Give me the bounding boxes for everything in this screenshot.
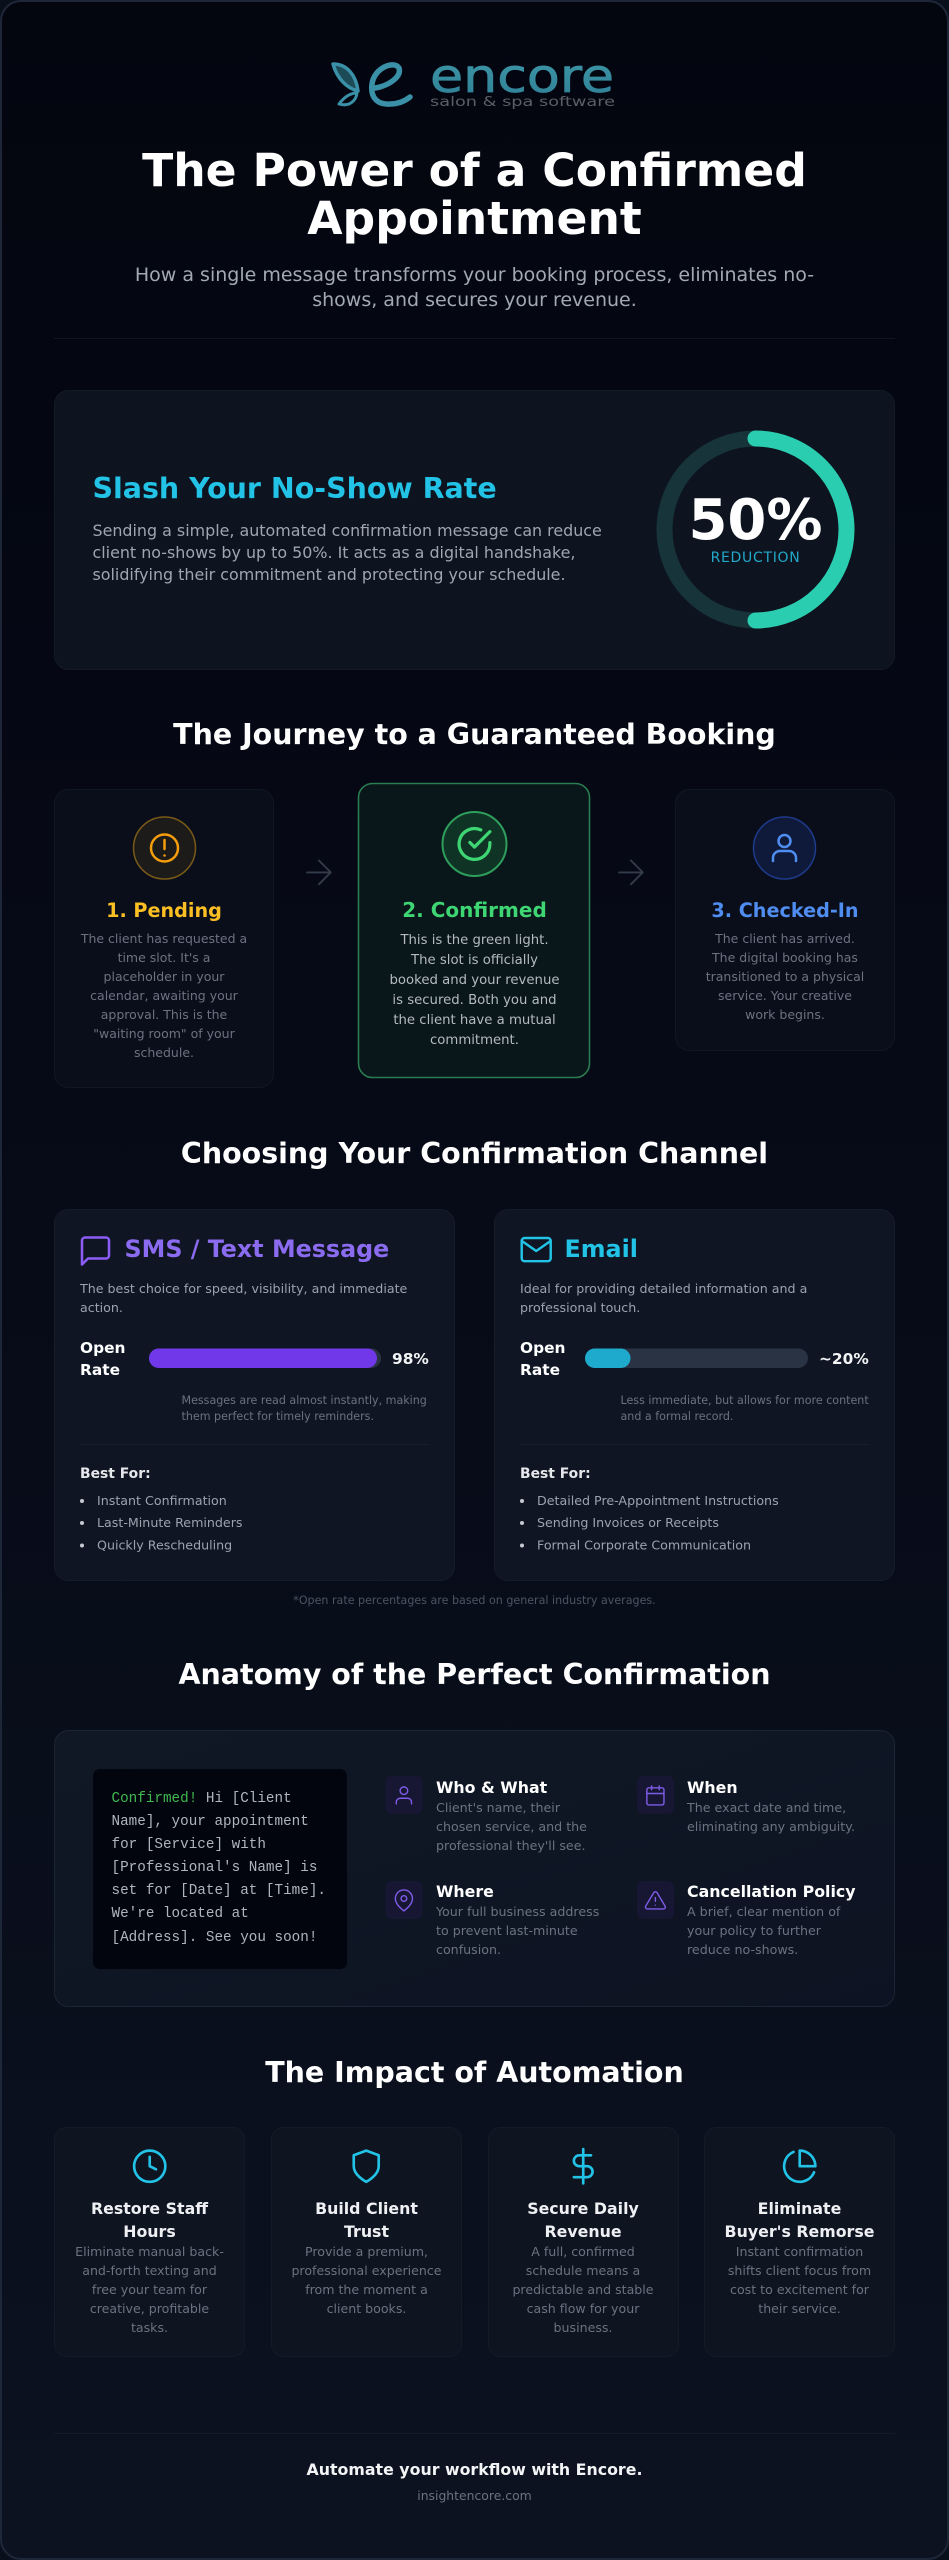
panel: secure daily revenue: predictable and stable bbox=[512, 2282, 654, 2297]
item: when bbox=[637, 1776, 855, 1834]
panel: restore staff hours: Restore Staff bbox=[91, 2199, 208, 2218]
panel: Email channel: Sending Invoices or Receipts bbox=[537, 1515, 719, 1530]
heading: journey: The Journey to a Guaranteed Booking bbox=[173, 718, 776, 751]
item: where: Your full business address bbox=[435, 1904, 599, 1919]
panel: secure daily revenue bbox=[488, 2128, 678, 2356]
panel: secure daily revenue: cash flow for your bbox=[527, 2301, 640, 2316]
sample message: [Professional's Name] is bbox=[112, 1860, 317, 1876]
item: cancellation policy: your policy to further bbox=[687, 1923, 822, 1938]
panel: step 3 checked-in: transitioned to a physical bbox=[706, 969, 864, 984]
panel: step 3 checked-in: 3. Checked-In bbox=[711, 899, 859, 922]
panel: step 1 pending bbox=[54, 790, 274, 1088]
panel: step 2 confirmed bbox=[358, 784, 590, 1078]
subtitle: shows, and secures your revenue. bbox=[312, 289, 637, 311]
sample message: Confirmed! Hi [Client bbox=[112, 1791, 292, 1807]
ring chart: 50% reduction: REDUCTION bbox=[711, 550, 800, 566]
panel: anatomy bbox=[54, 1730, 894, 2006]
panel: step 2 confirmed: booked and your revenue bbox=[390, 973, 560, 988]
item: who and what: chosen service, and the bbox=[436, 1819, 587, 1834]
panel: step 2 confirmed: This is the green light. bbox=[399, 933, 549, 948]
panel: SMS channel: action. bbox=[80, 1300, 123, 1315]
heading: anatomy: Anatomy of the Perfect Confirmation bbox=[178, 1658, 770, 1691]
panel: step 3 checked-in: The digital booking has bbox=[711, 950, 858, 965]
panel: Email channel: Formal Corporate Communication bbox=[537, 1538, 751, 1552]
icon: check bbox=[442, 812, 506, 876]
hero text: Sending a simple, automated confirmation message can reduce bbox=[92, 521, 602, 540]
sample message bbox=[93, 1769, 347, 1969]
panel: Email channel: Best For: bbox=[520, 1466, 591, 1482]
panel: eliminate buyer's remorse bbox=[704, 2128, 894, 2356]
panel: step 3 checked-in: service. Your creative bbox=[718, 988, 852, 1003]
panel: SMS channel: SMS / Text Message bbox=[124, 1235, 389, 1263]
icon: shield bbox=[354, 2151, 379, 2182]
panel: SMS channel: The best choice for speed, visibility, and immediate bbox=[79, 1281, 408, 1296]
sample message: set for [Date] at [Time]. bbox=[112, 1883, 326, 1899]
panel: step 1 pending: 1. Pending bbox=[106, 899, 222, 922]
icon: user bbox=[754, 817, 816, 879]
panel: secure daily revenue: Secure Daily bbox=[527, 2199, 640, 2218]
icon: alert bbox=[134, 817, 196, 879]
sample message: [Address]. See you soon! bbox=[112, 1930, 317, 1946]
panel: eliminate buyer's remorse: Eliminate bbox=[758, 2199, 841, 2218]
item: cancellation policy bbox=[637, 1881, 856, 1957]
footer: insightencore.com bbox=[417, 2488, 532, 2503]
panel: step 1 pending: approval. This is the bbox=[101, 1007, 228, 1022]
panel: eliminate buyer's remorse: cost to excitement for bbox=[730, 2282, 870, 2297]
panel: SMS channel: them perfect for timely reminders. bbox=[182, 1410, 374, 1423]
open rate bar: ~20% bbox=[520, 1339, 869, 1379]
panel: secure daily revenue: schedule means a bbox=[526, 2263, 640, 2278]
sample message: We're located at bbox=[112, 1906, 249, 1922]
item: when: When bbox=[687, 1778, 738, 1797]
ring chart: 50% reduction bbox=[664, 438, 847, 620]
open rate bar: ~20%: Open bbox=[520, 1339, 566, 1357]
panel: secure daily revenue: Revenue bbox=[544, 2222, 622, 2241]
panel: SMS channel: Instant Confirmation bbox=[97, 1493, 227, 1508]
panel: SMS channel: Quickly Rescheduling bbox=[97, 1538, 232, 1552]
panel: eliminate buyer's remorse: Buyer's Remorse bbox=[725, 2222, 874, 2241]
open rate bar: 98%: Rate bbox=[80, 1361, 120, 1379]
panel: Email channel: Less immediate, but allows for more content bbox=[620, 1394, 869, 1407]
hero text: client no-shows by up to 50%. It acts as a digital handshake, bbox=[92, 543, 575, 562]
panel: restore staff hours bbox=[54, 2128, 244, 2356]
panel: build client trust: from the moment a bbox=[305, 2282, 428, 2297]
panel: step 1 pending: calendar, awaiting your bbox=[90, 988, 239, 1003]
item: who and what: professional they'll see. bbox=[436, 1838, 586, 1853]
panel: Email channel: Email bbox=[564, 1235, 638, 1263]
title bbox=[142, 144, 807, 245]
panel: build client trust: professional experience bbox=[291, 2263, 442, 2278]
panel: hero no-show rate bbox=[54, 390, 894, 670]
ring chart: 50% reduction: 50% bbox=[688, 488, 823, 553]
logo: encore: encore bbox=[430, 49, 614, 103]
panel: step 2 confirmed: commitment. bbox=[430, 1033, 519, 1048]
hero text: solidifying their commitment and protecting your schedule. bbox=[92, 565, 566, 584]
panel: build client trust: Trust bbox=[344, 2222, 389, 2241]
icon: dollar bbox=[574, 2149, 593, 2183]
footer: Automate your workflow with Encore. bbox=[307, 2460, 642, 2479]
panel: build client trust bbox=[272, 2128, 462, 2356]
item: where: confusion. bbox=[436, 1942, 501, 1957]
panel: Email channel bbox=[494, 1210, 894, 1580]
panel: restore staff hours: Eliminate manual back- bbox=[75, 2244, 224, 2259]
arrow bbox=[619, 860, 643, 884]
icon: clock bbox=[134, 2151, 165, 2182]
panel: step 1 pending: "waiting room" of your bbox=[93, 1026, 236, 1041]
panel: SMS channel: Messages are read almost instantly, making bbox=[182, 1394, 427, 1407]
logo: encore: salon & spa software bbox=[430, 95, 615, 110]
footer bbox=[307, 2460, 642, 2503]
item: where: Where bbox=[436, 1882, 494, 1901]
icon: mail bbox=[522, 1238, 551, 1261]
panel: step 2 confirmed: 2. Confirmed bbox=[402, 898, 547, 922]
panel: Email channel: Detailed Pre-Appointment Instructions bbox=[537, 1493, 779, 1508]
arrow bbox=[307, 860, 331, 884]
panel: eliminate buyer's remorse: Instant confirmation bbox=[736, 2244, 863, 2259]
title: The Power of a Confirmed bbox=[142, 144, 807, 197]
panel: restore staff hours: creative, profitable bbox=[90, 2301, 209, 2316]
panel: step 3 checked-in: The client has arrived. bbox=[714, 931, 855, 946]
panel: restore staff hours: and-forth texting and bbox=[82, 2263, 217, 2278]
item: where: to prevent last-minute bbox=[436, 1923, 578, 1938]
panel: build client trust: client books. bbox=[327, 2301, 406, 2316]
heading: impact: The Impact of Automation bbox=[265, 2056, 684, 2089]
title: Appointment bbox=[307, 192, 642, 245]
panel: SMS channel: Last-Minute Reminders bbox=[97, 1515, 242, 1530]
panel: step 1 pending: placeholder in your bbox=[104, 969, 225, 984]
panel: restore staff hours: Hours bbox=[123, 2222, 176, 2241]
item: when: The exact date and time, bbox=[686, 1800, 846, 1815]
panel: Email channel: professional touch. bbox=[520, 1300, 640, 1315]
panel: step 1 pending: time slot. It's a bbox=[118, 950, 210, 965]
panel: step 2 confirmed: The slot is officially bbox=[410, 953, 538, 968]
item: when: eliminating any ambiguity. bbox=[687, 1819, 855, 1834]
logo: encore bbox=[333, 49, 615, 110]
panel: step 2 confirmed: is secured. Both you and bbox=[392, 993, 557, 1008]
footnote: *Open rate percentages are based on general industry averages. bbox=[293, 1594, 656, 1607]
subtitle: How a single message transforms your booking process, eliminates no- bbox=[135, 264, 814, 286]
item: cancellation policy: reduce no-shows. bbox=[687, 1942, 798, 1957]
item: cancellation policy: Cancellation Policy bbox=[687, 1882, 856, 1901]
open rate bar: 98%: 98% bbox=[392, 1350, 429, 1368]
open rate bar: ~20%: Rate bbox=[520, 1361, 560, 1379]
panel: SMS channel bbox=[54, 1210, 454, 1580]
panel: step 1 pending: schedule. bbox=[134, 1045, 194, 1060]
item: who and what bbox=[386, 1776, 587, 1853]
sample message: for [Service] with bbox=[112, 1837, 266, 1853]
panel: eliminate buyer's remorse: shifts client focus from bbox=[728, 2263, 871, 2278]
item: who and what: Who & What bbox=[436, 1778, 548, 1797]
heading: channel: Choosing Your Confirmation Channel bbox=[181, 1137, 768, 1170]
hero text bbox=[92, 521, 602, 584]
open rate bar: 98% bbox=[80, 1339, 429, 1379]
panel: step 2 confirmed: the client have a mutual bbox=[393, 1013, 556, 1028]
panel: step 3 checked-in bbox=[676, 790, 894, 1050]
panel: build client trust: Provide a premium, bbox=[305, 2244, 428, 2259]
item: who and what: Client's name, their bbox=[436, 1800, 561, 1815]
hero heading: Slash Your No-Show Rate bbox=[92, 472, 497, 505]
icon: pie chart bbox=[784, 2151, 815, 2182]
item: where bbox=[386, 1881, 599, 1957]
panel: Email channel: Ideal for providing detailed information and a bbox=[520, 1281, 807, 1296]
open rate bar: 98%: Open bbox=[80, 1339, 126, 1357]
subtitle bbox=[135, 264, 814, 311]
panel: restore staff hours: tasks. bbox=[131, 2320, 168, 2335]
panel: step 3 checked-in: work begins. bbox=[745, 1007, 825, 1022]
panel: SMS channel: Best For: bbox=[80, 1466, 151, 1482]
panel: secure daily revenue: business. bbox=[554, 2320, 612, 2335]
open rate bar: ~20%: ~20% bbox=[819, 1350, 869, 1368]
panel: secure daily revenue: A full, confirmed bbox=[531, 2244, 635, 2259]
panel: restore staff hours: free your team for bbox=[92, 2282, 208, 2297]
panel: build client trust: Build Client bbox=[315, 2199, 418, 2218]
panel: eliminate buyer's remorse: their service. bbox=[758, 2301, 841, 2316]
icon: message bbox=[82, 1238, 109, 1264]
item: cancellation policy: A brief, clear mention of bbox=[687, 1904, 841, 1919]
panel: Email channel: and a formal record. bbox=[620, 1410, 733, 1423]
panel: step 1 pending: The client has requested a bbox=[80, 931, 247, 946]
sample message: Name], your appointment bbox=[112, 1814, 309, 1830]
